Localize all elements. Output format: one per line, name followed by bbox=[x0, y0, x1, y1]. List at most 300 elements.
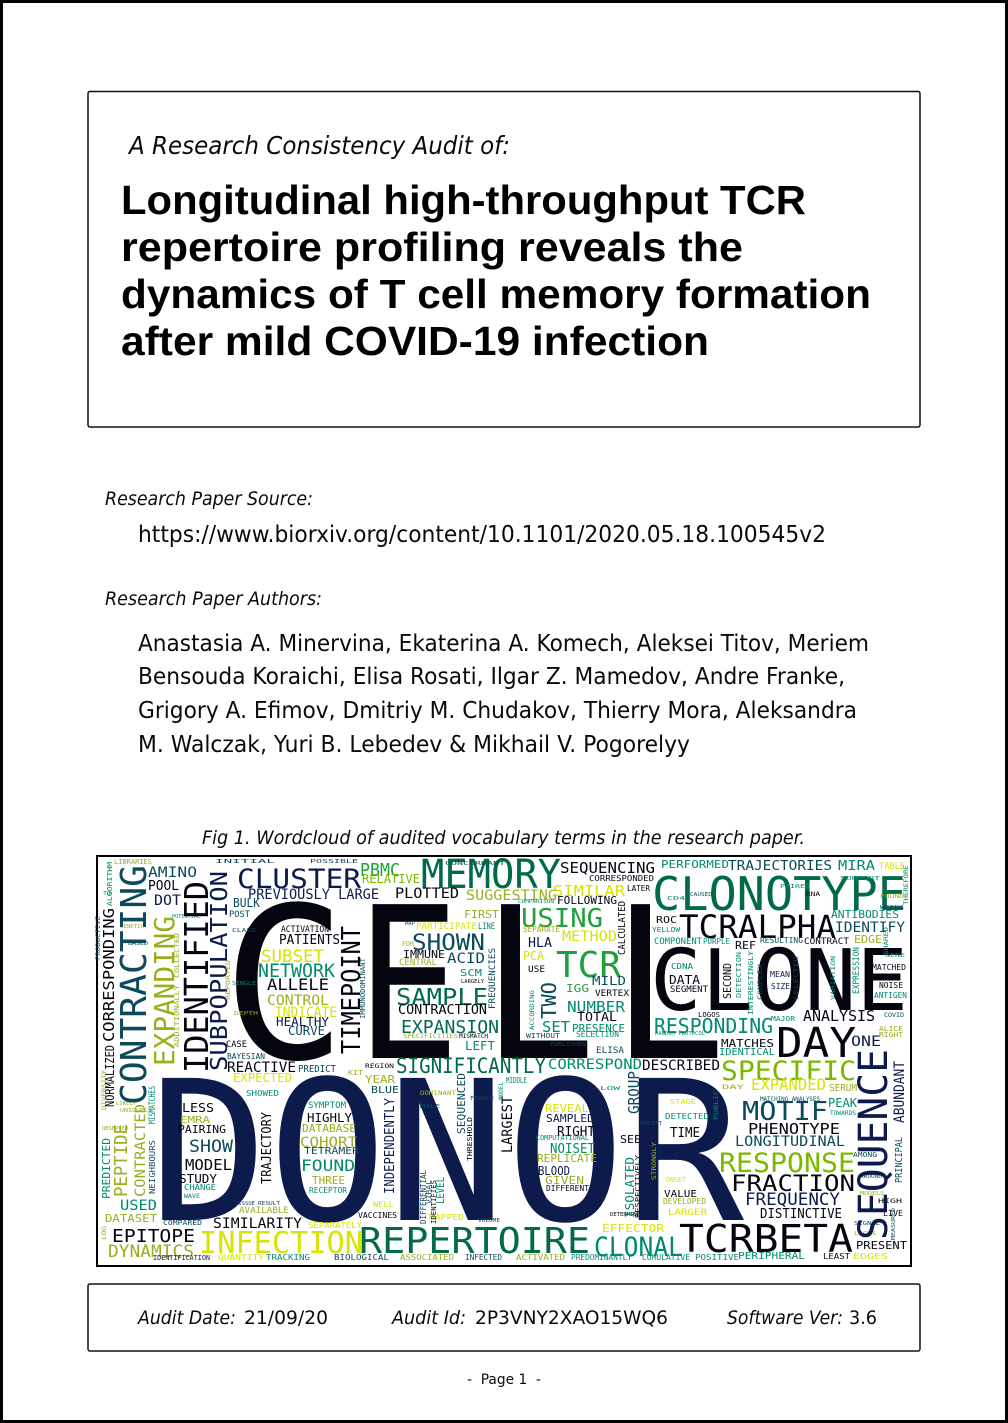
medium and small horizontal words: WEEKS bbox=[880, 905, 904, 911]
title panel bbox=[88, 92, 920, 427]
medium and small horizontal words: EDGES bbox=[853, 1252, 888, 1261]
medium and small horizontal words: METHOD bbox=[562, 929, 617, 945]
medium and small horizontal words: SHOW bbox=[189, 1137, 234, 1157]
medium and small horizontal words: MAPPED bbox=[429, 1213, 464, 1222]
medium and small horizontal words: KIT bbox=[348, 1069, 364, 1077]
medium and small horizontal words: ANTIGEN bbox=[874, 991, 907, 1000]
medium and small horizontal words: QUANTITY bbox=[218, 1253, 264, 1262]
vertical words: ADDITIONALLY bbox=[173, 984, 181, 1047]
vertical words: MISMATCHES bbox=[148, 1086, 158, 1124]
medium and small horizontal words: REPLICATE bbox=[537, 1152, 597, 1165]
largest word: CELL bbox=[222, 862, 726, 1108]
vertical words: LEVEL bbox=[434, 1177, 447, 1204]
medium and small horizontal words: USED bbox=[120, 1198, 157, 1214]
audit date: 21/09/20 bbox=[244, 1307, 328, 1329]
medium and small horizontal words: DISTINCTIVE bbox=[760, 1207, 842, 1222]
medium and small horizontal words: DAY bbox=[722, 1084, 745, 1091]
medium and small horizontal words: TRAJECTORIES bbox=[728, 859, 832, 874]
medium and small horizontal words: SEPARATELY bbox=[308, 1221, 362, 1230]
medium and small horizontal words: PREDOMINANTLY bbox=[571, 1253, 632, 1262]
medium and small horizontal words: LEFT bbox=[465, 1039, 495, 1053]
medium and small horizontal words: SIMILARITY bbox=[213, 1216, 303, 1232]
word: FRACTION: FRACTION bbox=[731, 1172, 855, 1197]
medium and small horizontal words: FOLLOWING bbox=[557, 894, 617, 907]
medium and small horizontal words: LATER bbox=[627, 884, 650, 893]
paper title: repertoire profiling reveals the bbox=[121, 224, 743, 270]
medium and small horizontal words: LOW bbox=[600, 1086, 622, 1092]
vertical words: INDEPENDENTLY bbox=[383, 1098, 398, 1194]
vertical words: ALGORITHM bbox=[106, 862, 114, 906]
page number: - Page 1 - bbox=[467, 1372, 541, 1388]
word: SPECIFIC: SPECIFIC bbox=[721, 1056, 856, 1087]
largest word: DONOR: DONOR bbox=[149, 1039, 745, 1266]
word: DAY: DAY bbox=[776, 1019, 856, 1067]
word: MEMORY: MEMORY bbox=[421, 852, 561, 898]
medium and small horizontal words: DETERMINE bbox=[610, 1212, 640, 1218]
medium and small horizontal words: INITIAL bbox=[215, 859, 275, 865]
medium and small horizontal words: GENE bbox=[885, 953, 905, 959]
medium and small horizontal words: CAUSED bbox=[690, 892, 712, 898]
vertical words: PUBLIC bbox=[713, 1089, 720, 1120]
medium and small horizontal words: LARGELY bbox=[461, 979, 484, 985]
audit id: 2P3VNY2XAO15WQ6 bbox=[475, 1307, 668, 1329]
largest word: CELL: L bbox=[481, 862, 596, 1108]
medium and small horizontal words: POTENTIAL bbox=[172, 914, 200, 920]
medium and small horizontal words: SEE bbox=[620, 1133, 641, 1146]
medium and small horizontal words: SUPPORT bbox=[840, 876, 880, 882]
medium and small horizontal words: RANDOM PROTOCOL bbox=[655, 1031, 705, 1037]
medium and small horizontal words: SIMILAR bbox=[553, 882, 626, 900]
medium and small horizontal words: FOUND bbox=[301, 1156, 355, 1175]
vertical words: IDENTIFIES bbox=[430, 1180, 438, 1224]
medium and small horizontal words: CENTRAL bbox=[399, 958, 437, 968]
medium and small horizontal words: MILD bbox=[592, 974, 626, 988]
vertical words: FREQUENCIES bbox=[488, 948, 498, 1009]
medium and small horizontal words: EXPANSION bbox=[401, 1017, 499, 1038]
software version: 3.6 bbox=[849, 1307, 877, 1329]
medium and small horizontal words: DOMINANT bbox=[420, 1090, 456, 1097]
vertical words: IMMUNODOMINANT bbox=[359, 957, 367, 1019]
medium and small horizontal words: ONE bbox=[851, 1034, 881, 1050]
medium and small horizontal words: FREQUENCY bbox=[745, 1190, 840, 1210]
medium and small horizontal words: BLUE bbox=[371, 1085, 399, 1096]
vertical words: ABUNDANT bbox=[892, 1060, 908, 1123]
medium and small horizontal words: VOLUME bbox=[478, 1218, 500, 1224]
medium and small horizontal words: ANTIBODIES bbox=[831, 908, 899, 921]
medium and small horizontal words: IDENTIFICATION bbox=[153, 1254, 210, 1262]
medium and small horizontal words: RELATIVE bbox=[362, 872, 420, 886]
medium and small horizontal words: EDGE bbox=[854, 933, 882, 946]
vertical words: TWO bbox=[537, 982, 561, 1019]
medium and small horizontal words: HEALTHY bbox=[276, 1015, 330, 1029]
medium and small horizontal words: CORRESPOND bbox=[548, 1057, 642, 1073]
medium and small horizontal words: BAYESIAN bbox=[227, 1052, 265, 1061]
medium and small horizontal words: YEAR bbox=[365, 1073, 395, 1086]
medium and small horizontal words: SINGLE bbox=[232, 981, 256, 987]
medium and small horizontal words: RNA bbox=[806, 891, 820, 898]
paper title: after mild COVID-19 infection bbox=[121, 318, 709, 364]
vertical words: LOG bbox=[101, 1226, 108, 1240]
research paper authors: Grigory A. Efimov, Dmitriy M. Chudakov, Thierry Mora, Aleksandra bbox=[138, 698, 857, 724]
software version: Software Ver: bbox=[727, 1307, 843, 1329]
medium and small horizontal words: GENETIC bbox=[120, 924, 144, 930]
medium and small horizontal words: HIGHLY bbox=[307, 1111, 353, 1125]
vertical words: STRONGLY bbox=[651, 1142, 658, 1180]
vertical words: REPORTED bbox=[225, 959, 232, 1000]
medium and small horizontal words: PERFORMED bbox=[661, 858, 729, 871]
largest word: CELL: L bbox=[611, 862, 726, 1108]
medium and small horizontal words: VALUE bbox=[664, 1189, 697, 1200]
medium and small horizontal words: ONSET bbox=[666, 1176, 687, 1184]
medium and small horizontal words: RIGHT bbox=[879, 1031, 904, 1039]
medium and small horizontal words: TOWARDS bbox=[830, 1110, 856, 1117]
medium and small horizontal words: POOL bbox=[148, 879, 179, 894]
medium and small horizontal words: DIFFERENT bbox=[546, 1184, 589, 1193]
medium and small horizontal words: PBMC bbox=[360, 860, 400, 881]
medium and small horizontal words: NOISE bbox=[879, 981, 903, 990]
audit date: Audit Date: bbox=[136, 1307, 236, 1329]
vertical words: EXPANDING bbox=[148, 916, 181, 1066]
medium and small horizontal words: SELECTION bbox=[576, 1030, 619, 1039]
vertical words: VIRAL bbox=[425, 1180, 433, 1204]
medium and small horizontal words: SET bbox=[542, 1018, 570, 1036]
medium and small horizontal words: BASED bbox=[128, 941, 148, 947]
word: RESPONDING: RESPONDING bbox=[654, 1014, 773, 1038]
paper title: dynamics of T cell memory formation bbox=[121, 271, 871, 317]
vertical words: ISOLATED bbox=[623, 1157, 637, 1218]
medium and small horizontal words: REF bbox=[735, 939, 756, 952]
medium and small horizontal words: AROUND bbox=[860, 1174, 882, 1180]
vertical words: COLLECTED bbox=[173, 933, 181, 978]
medium and small horizontal words: SYMPTOM bbox=[308, 1101, 347, 1111]
medium and small horizontal words: CDNA bbox=[671, 962, 693, 971]
medium and small horizontal words: WELL bbox=[373, 1200, 394, 1209]
medium and small horizontal words: POST bbox=[229, 910, 251, 920]
medium and small horizontal words: CLASS bbox=[232, 928, 256, 934]
medium and small horizontal words: AVAILABLE bbox=[239, 1206, 289, 1216]
medium and small horizontal words: AMINO bbox=[148, 865, 197, 881]
medium and small horizontal words: OBSERVED bbox=[102, 1126, 128, 1132]
medium and small horizontal words: DEVELOPED bbox=[663, 1197, 706, 1206]
medium and small horizontal words: MEAN bbox=[770, 970, 790, 979]
medium and small horizontal words: SHOWED bbox=[246, 1089, 279, 1098]
medium and small horizontal words: EXPECTED bbox=[233, 1071, 292, 1085]
medium and small horizontal words: MIRA bbox=[838, 859, 875, 874]
medium and small horizontal words: ANALYSIS bbox=[803, 1007, 875, 1025]
medium and small horizontal words: TABLE bbox=[879, 862, 905, 872]
medium and small horizontal words: TRACKING bbox=[266, 1253, 310, 1262]
medium and small horizontal words: AMONG bbox=[853, 1151, 877, 1159]
medium and small horizontal words: COHORT bbox=[300, 1135, 358, 1151]
medium and small horizontal words: LIVE bbox=[883, 1209, 903, 1218]
paper title: Longitudinal high-throughput TCR bbox=[121, 177, 806, 223]
medium and small horizontal words: SIZE bbox=[771, 982, 790, 991]
medium and small horizontal words: DESCRIBED bbox=[642, 1058, 720, 1074]
medium and small horizontal words: ALICE bbox=[879, 1025, 903, 1033]
word: USING: USING bbox=[521, 904, 603, 934]
vertical words: DIFFERENTIAL bbox=[419, 1170, 428, 1224]
wordcloud figure bbox=[95, 852, 911, 1266]
medium and small horizontal words: PURPLE bbox=[703, 937, 730, 946]
word: SAMPLE: SAMPLE bbox=[396, 985, 488, 1011]
largest word: CELL: E bbox=[356, 862, 460, 1108]
word: CLONAL: CLONAL bbox=[594, 1232, 683, 1263]
medium and small horizontal words: RIGHT bbox=[557, 1125, 595, 1140]
medium and small horizontal words: LINE bbox=[478, 922, 495, 932]
medium and small horizontal words: LOGOS bbox=[698, 1011, 720, 1019]
medium and small horizontal words: TOTAL bbox=[577, 1010, 617, 1024]
vertical words: TRAJECTORY bbox=[260, 1112, 275, 1184]
medium and small horizontal words: RECEPTOR bbox=[309, 1186, 347, 1195]
medium and small horizontal words: TIME bbox=[670, 1126, 700, 1141]
word: SIGNIFICANTLY: SIGNIFICANTLY bbox=[396, 1054, 546, 1078]
vertical words: SELECTED bbox=[793, 955, 800, 1000]
medium and small horizontal words bbox=[102, 858, 907, 1262]
medium and small horizontal words: STUDY bbox=[179, 1172, 218, 1186]
medium and small horizontal words: ALLELE bbox=[267, 975, 329, 994]
medium and small horizontal words: IDENTIFY bbox=[835, 920, 906, 936]
medium and small horizontal words: VERTEX bbox=[595, 989, 630, 999]
medium and small horizontal words: IDENTICAL bbox=[719, 1047, 775, 1058]
vertical words: SHARED bbox=[883, 927, 890, 955]
vertical words: CALCULATED bbox=[617, 901, 628, 955]
medium and small horizontal words: PUBLISHED bbox=[550, 1042, 586, 1048]
medium and small horizontal words: SPECIFICITIES bbox=[403, 1033, 458, 1040]
medium and small horizontal words: BIOLOGICAL bbox=[334, 1253, 389, 1262]
medium and small horizontal words: MODEL bbox=[185, 1156, 232, 1174]
vertical words: RESPECTIVELY bbox=[634, 1154, 642, 1218]
research paper authors: Anastasia A. Minervina, Ekaterina A. Komech, Aleksei Titov, Meriem bbox=[138, 631, 869, 657]
medium and small horizontal words: LEAST bbox=[823, 1252, 850, 1261]
research paper source bbox=[105, 488, 826, 548]
medium and small horizontal words: DATASET bbox=[105, 1212, 157, 1225]
audit subtitle: A Research Consistency Audit of: bbox=[127, 131, 510, 160]
paper title bbox=[121, 177, 871, 364]
medium and small horizontal words: PAIRING bbox=[178, 1123, 226, 1136]
medium and small horizontal words: PREVIOUSLY LARGE bbox=[248, 887, 379, 903]
medium and small horizontal words: USE bbox=[528, 965, 545, 975]
vertical words: PRODUCTIVE bbox=[95, 916, 102, 960]
medium and small horizontal words: DEPTH bbox=[234, 1011, 258, 1017]
medium and small horizontal words: COVID bbox=[884, 1012, 904, 1019]
medium and small horizontal words: FEMALE bbox=[470, 1096, 494, 1102]
figure caption: Fig 1. Wordcloud of audited vocabulary terms in the research paper. bbox=[202, 827, 805, 849]
medium and small horizontal words: DETECTED bbox=[665, 1112, 709, 1121]
vertical words: INTERESTINGLY bbox=[747, 950, 755, 1015]
word: MOTIF: MOTIF bbox=[742, 1097, 828, 1127]
medium and small horizontal words: PHENOTYPE bbox=[748, 1120, 840, 1138]
word: EPITOPE: EPITOPE bbox=[112, 1226, 195, 1247]
medium and small horizontal words: SERUM bbox=[829, 1083, 857, 1094]
vertical words: PREDICTED bbox=[100, 1138, 113, 1199]
audit id bbox=[390, 1307, 668, 1329]
medium and small horizontal words: FIRST bbox=[464, 908, 499, 921]
medium and small horizontal words: ACTIVATED bbox=[516, 1253, 565, 1262]
medium and small horizontal words: DATABASE bbox=[302, 1122, 356, 1135]
vertical words: MEASURED bbox=[891, 1208, 897, 1240]
medium and small horizontal words: PARTICIPATE bbox=[416, 922, 477, 932]
medium and small horizontal words: MIDDLE bbox=[506, 1076, 527, 1085]
medium and small horizontal words: ASSOCIATED bbox=[400, 1253, 454, 1262]
medium and small horizontal words: POSITIVE bbox=[695, 1253, 739, 1262]
medium and small horizontal words: LARGER bbox=[668, 1208, 708, 1218]
vertical words: CONTRACTING bbox=[114, 865, 155, 1105]
vertical words: SEQUENCE bbox=[851, 1049, 897, 1240]
vertical words: NEIGHBOURS bbox=[148, 1140, 157, 1194]
medium and small horizontal words: CHANGE bbox=[184, 1183, 216, 1192]
medium and small horizontal words: COMPUTATIONAL bbox=[536, 1134, 589, 1142]
medium and small horizontal words: MATCHING ANALYSES bbox=[760, 1096, 820, 1103]
medium and small horizontal words: ELISA bbox=[596, 1046, 625, 1056]
medium and small horizontal words: INFECTED bbox=[465, 1253, 502, 1262]
medium and small horizontal words: VACCINES bbox=[358, 1211, 397, 1220]
vertical words: PEPTIDE bbox=[111, 1124, 132, 1197]
vertical words: DETECTION bbox=[735, 952, 743, 998]
vertical words: COMPLEX bbox=[757, 963, 764, 1000]
medium and small horizontal words: TISSUE bbox=[235, 1201, 255, 1207]
medium and small horizontal words: IMMUNE bbox=[403, 948, 445, 961]
medium and small horizontal words: MAJOR bbox=[771, 1015, 796, 1023]
medium and small horizontal words: SUBSET bbox=[261, 947, 324, 967]
medium and small horizontal words: NUMBER bbox=[567, 998, 626, 1016]
vertical words: PRINCIPAL bbox=[894, 1137, 905, 1183]
vertical words: LARGEST bbox=[500, 1095, 516, 1153]
medium and small horizontal words: EMRA bbox=[180, 1115, 210, 1126]
medium and small horizontal words: GIVEN bbox=[545, 1174, 584, 1187]
medium and small horizontal words: MATCHED bbox=[872, 963, 906, 972]
word: RESPONSE: RESPONSE bbox=[719, 1148, 855, 1179]
vertical words: VARIATION bbox=[830, 955, 837, 1000]
word: TCRALPHA: TCRALPHA bbox=[679, 908, 836, 946]
vertical words: CORRESPONDING bbox=[100, 908, 118, 1042]
medium and small horizontal words: COMPARED bbox=[163, 1219, 202, 1227]
medium and small horizontal words: MISMATCH bbox=[459, 1033, 488, 1040]
medium and small horizontal words: PREDICT bbox=[298, 1064, 336, 1075]
medium and small horizontal words: SCM bbox=[460, 968, 482, 979]
medium and small horizontal words: HIGH bbox=[878, 1198, 903, 1205]
medium and small horizontal words: SHOWN bbox=[412, 931, 485, 956]
vertical words: TIMEPOINT bbox=[337, 926, 367, 1054]
medium and small horizontal words: CONTRACT bbox=[804, 937, 850, 947]
vertical words: SEQUENCED bbox=[455, 1073, 468, 1134]
medium and small horizontal words: PRESENT bbox=[856, 1239, 907, 1252]
medium and small horizontal words: RESULT bbox=[258, 1201, 280, 1207]
medium and small horizontal words: MODELS bbox=[860, 1191, 884, 1197]
medium and small horizontal words: LOCUS bbox=[854, 1231, 876, 1237]
research paper authors: Research Paper Authors: bbox=[105, 588, 322, 610]
medium and small horizontal words: EXPANDED bbox=[751, 1075, 826, 1094]
medium and small horizontal words: ROC bbox=[656, 915, 677, 926]
medium and small horizontal words: SUGGESTING bbox=[466, 888, 557, 904]
word: REPERTOIRE: REPERTOIRE bbox=[359, 1221, 590, 1262]
medium and small horizontal words: REACTIVE bbox=[227, 1060, 296, 1076]
medium and small horizontal words: COMPONENT bbox=[654, 937, 703, 947]
vertical words: DIVERSITY bbox=[101, 1070, 108, 1110]
medium and small horizontal words: CONTROL bbox=[267, 993, 329, 1009]
vertical words bbox=[95, 862, 910, 1240]
medium and small horizontal words: TO bbox=[103, 891, 111, 897]
medium and small horizontal words: YELLOW bbox=[652, 926, 681, 934]
medium and small horizontal words: CD4 bbox=[667, 896, 685, 902]
vertical words: EXPRESSION bbox=[852, 947, 862, 994]
medium and small horizontal words: FOUND bbox=[880, 894, 904, 900]
medium and small horizontal words: COMPARISON bbox=[518, 899, 554, 905]
medium and small horizontal words: INDICATE bbox=[275, 1005, 337, 1021]
medium and small horizontal words: HLA bbox=[528, 936, 552, 951]
medium and small horizontal words: DATA bbox=[669, 973, 701, 987]
medium and small horizontal words: ACTIVATION bbox=[281, 925, 329, 935]
vertical words: ACCORDING bbox=[529, 990, 536, 1030]
medium and small horizontal words: PRESENCE bbox=[572, 1022, 625, 1035]
vertical words: MODEL bbox=[498, 1082, 505, 1100]
medium and small horizontal words: THREE bbox=[312, 1174, 345, 1187]
medium and small horizontal words: LONGITUDINAL bbox=[735, 1134, 845, 1150]
medium and small horizontal words: CUMULATIVE bbox=[642, 1253, 690, 1262]
medium and small horizontal words: NOISET bbox=[550, 1142, 595, 1157]
medium and small horizontal words: REVEAL bbox=[545, 1102, 589, 1115]
medium and small horizontal words: SEPARATE bbox=[523, 925, 560, 934]
medium and small horizontal words: NETWORK bbox=[258, 960, 336, 982]
medium and small horizontal words: CURVE bbox=[288, 1024, 325, 1038]
medium and small horizontal words: PAIRED bbox=[780, 884, 810, 890]
medium and small horizontal words: PLOTTED bbox=[395, 886, 459, 902]
research paper authors bbox=[105, 588, 869, 758]
medium and small horizontal words: BLOOD bbox=[538, 1164, 570, 1178]
audit details panel bbox=[88, 1284, 920, 1351]
medium and small horizontal words: REGION bbox=[365, 1063, 395, 1070]
medium and small horizontal words: RESULTING bbox=[760, 936, 803, 945]
medium and small horizontal words: MATCHES bbox=[721, 1037, 774, 1050]
medium and small horizontal words: PROJECT bbox=[640, 1121, 662, 1127]
vertical words: GROUP bbox=[625, 1071, 643, 1114]
medium and small horizontal words: UNIQUELY bbox=[120, 1108, 152, 1114]
medium and small horizontal words: LIKELY bbox=[116, 1101, 136, 1107]
medium and small horizontal words: ACID bbox=[447, 951, 485, 967]
medium and small horizontal words: MAP bbox=[405, 921, 415, 927]
medium and small horizontal words: WITHOUT bbox=[526, 1032, 561, 1040]
medium and small horizontal words: EFFECTOR bbox=[602, 1222, 664, 1235]
medium and small horizontal words: SEGMENT bbox=[670, 985, 709, 995]
medium and small horizontal words: IGG bbox=[566, 982, 589, 995]
vertical words: THEREFORE bbox=[903, 865, 910, 905]
largest word: CELL: C bbox=[222, 862, 347, 1108]
vertical words: NORMALIZED bbox=[103, 1045, 117, 1107]
medium and small horizontal words: SIGNAL bbox=[854, 1221, 880, 1227]
word: TCRBETA: TCRBETA bbox=[679, 1217, 853, 1261]
medium and small horizontal words: TETRAMER bbox=[304, 1146, 360, 1157]
vertical words: SECOND bbox=[721, 963, 734, 999]
medium and small horizontal words: PEAK bbox=[828, 1096, 858, 1110]
medium and small horizontal words: SAMPLED bbox=[546, 1112, 594, 1125]
vertical words: THRESHOLD bbox=[466, 1117, 474, 1161]
word: CLONE: CLONE bbox=[650, 932, 908, 1031]
research paper authors: Bensouda Koraichi, Elisa Rosati, Ilgar Z. Mamedov, Andre Franke, bbox=[138, 664, 845, 690]
word: TCR: TCR bbox=[556, 945, 621, 986]
medium and small horizontal words: BULK bbox=[233, 896, 261, 910]
medium and small horizontal words: POSSIBLE bbox=[310, 859, 358, 865]
medium and small horizontal words: DOT bbox=[154, 893, 182, 909]
audit id: Audit Id: bbox=[390, 1307, 466, 1329]
medium and small horizontal words: SEQUENCING bbox=[560, 859, 655, 877]
medium and small horizontal words: MALE bbox=[420, 1104, 440, 1110]
medium and small horizontal words: PCA bbox=[523, 949, 545, 963]
audit date bbox=[136, 1307, 328, 1329]
medium and small horizontal words: PATIENTS bbox=[279, 933, 340, 948]
word: CLUSTER: CLUSTER bbox=[237, 864, 362, 895]
medium and small horizontal words: LESS bbox=[182, 1101, 214, 1115]
medium and small horizontal words: LIBRARIES bbox=[114, 858, 152, 866]
research paper source: Research Paper Source: bbox=[105, 488, 313, 510]
